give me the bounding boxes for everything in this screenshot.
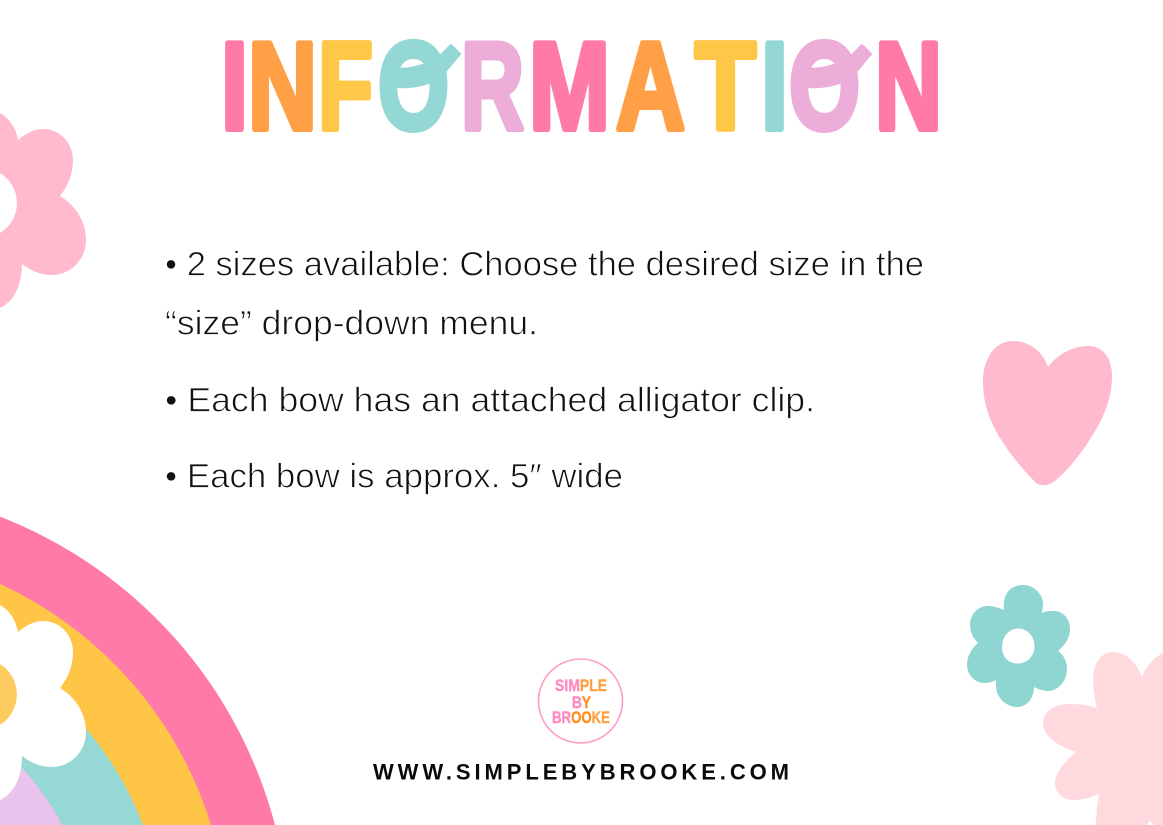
- title letter T: T: [695, 18, 756, 156]
- title letter M: M: [529, 18, 610, 156]
- icon: teal flower: [967, 585, 1070, 707]
- title letter I: I: [221, 18, 248, 156]
- rainbow: [0, 517, 275, 825]
- body text: [165, 246, 924, 496]
- bullet: alligator clip: • Each bow has an attached alligator clip.: [165, 382, 815, 420]
- bullet: sizes line 2: “size” drop-down menu.: [165, 304, 538, 342]
- rainbow lilac band: [0, 747, 62, 825]
- logo: [538, 659, 622, 743]
- title letter O: O: [378, 18, 449, 156]
- icon: pale pink flower: [1043, 652, 1163, 825]
- title: [221, 18, 942, 156]
- rainbow yellow band: [0, 584, 211, 825]
- title letter O: O: [789, 18, 860, 156]
- icon: white flower on rainbow: [0, 605, 86, 800]
- bullet: sizes line 1: • 2 sizes available: Choose the desired size in the: [165, 246, 924, 284]
- title letter R: R: [461, 18, 524, 156]
- icon: flower centre: [0, 664, 17, 725]
- title letter N: N: [248, 18, 317, 156]
- icon: pink flower left: [0, 113, 86, 308]
- icon: heart: [983, 341, 1112, 485]
- logo ring: [538, 659, 622, 743]
- title letter A: A: [616, 18, 685, 156]
- rainbow teal band: [0, 657, 143, 825]
- title letter I: I: [761, 18, 788, 156]
- rainbow pink band: [0, 517, 275, 825]
- bullet: width: • Each bow is approx. 5″ wide: [165, 458, 623, 496]
- logo text: [552, 676, 610, 727]
- logo text: BROOKE: [552, 708, 610, 727]
- title letter F: F: [318, 18, 373, 156]
- logo text: BY: [572, 693, 592, 712]
- logo text: SIMPLE: [555, 676, 607, 695]
- title letter N: N: [875, 18, 942, 156]
- website url: WWW.SIMPLEBYBROOKE.COM: [373, 760, 789, 784]
